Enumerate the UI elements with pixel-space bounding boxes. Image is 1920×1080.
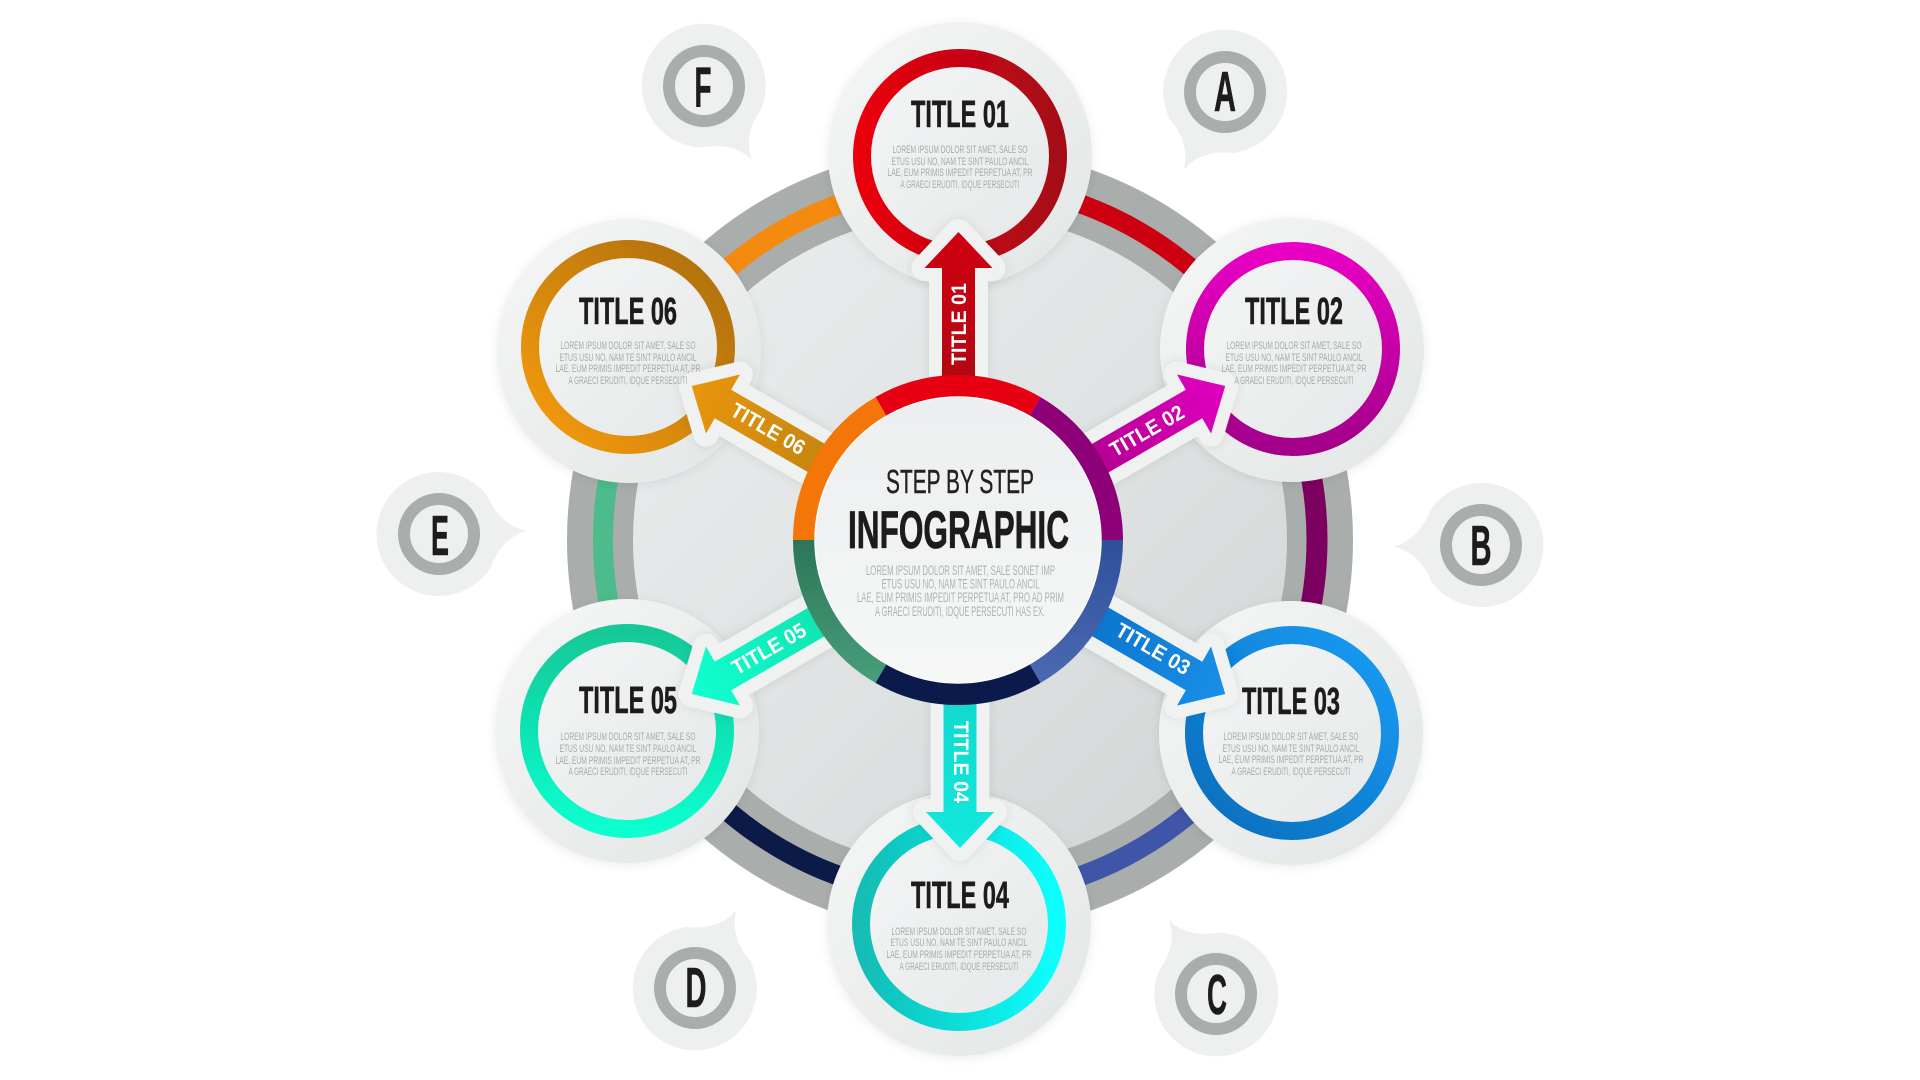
badge A: A xyxy=(1214,60,1236,124)
badge D xyxy=(611,881,791,1072)
arrow label 01: TITLE 01 xyxy=(948,283,971,365)
node text 04: TITLE 04 xyxy=(911,875,1009,917)
outer band segment: navy xyxy=(651,718,960,897)
badge A xyxy=(1129,8,1309,199)
node text 03: ETUS USU NO, NAM TE SINT PAULO ANCIL xyxy=(1222,743,1360,755)
center disc xyxy=(815,397,1101,683)
badge E xyxy=(374,469,529,598)
node circle 06 xyxy=(497,219,761,483)
center title: INFOGRAPHIC xyxy=(848,501,1069,560)
node circle 05 xyxy=(495,599,759,863)
node text 06: A GRAECI ERUDITI, IDQUE PERSECUTI xyxy=(568,375,688,387)
node text 05: A GRAECI ERUDITI, IDQUE PERSECUTI xyxy=(568,766,688,778)
node text 02: LAE, EUM PRIMIS IMPEDIT PERPETUA AT, PR xyxy=(1222,363,1367,375)
arrow label 04: TITLE 04 xyxy=(949,721,972,803)
center heading: STEP BY STEP xyxy=(886,464,1034,501)
node text 04: LAE, EUM PRIMIS IMPEDIT PERPETUA AT, PR xyxy=(886,949,1032,961)
node text 01: LOREM IPSUM DOLOR SIT AMET, SALE SO xyxy=(892,144,1028,156)
outer band segment: orange xyxy=(651,183,960,362)
node text 05: TITLE 05 xyxy=(579,680,677,722)
arrow label 02: TITLE 02 xyxy=(1106,401,1189,462)
hub segment: orange xyxy=(804,407,881,540)
arrow label 05: TITLE 05 xyxy=(728,619,811,680)
arrow 05 xyxy=(675,586,846,723)
node text 03: A GRAECI ERUDITI, IDQUE PERSECUTI xyxy=(1232,766,1350,778)
node text 02: A GRAECI ERUDITI, IDQUE PERSECUTI xyxy=(1234,375,1354,387)
background hexagon disc xyxy=(600,180,1320,900)
node circle 02 xyxy=(1160,218,1424,482)
node text 05 xyxy=(556,680,701,778)
node text 01: TITLE 01 xyxy=(911,94,1009,136)
badge B xyxy=(1392,482,1545,609)
node text 01: ETUS USU NO, NAM TE SINT PAULO ANCIL xyxy=(892,156,1028,168)
center paragraph: A GRAECI ERUDITI, IDQUE PERSECUTI HAS EX. xyxy=(875,603,1045,619)
node text 03 xyxy=(1218,681,1364,778)
badge C xyxy=(1116,886,1302,1080)
node text 06: TITLE 06 xyxy=(579,291,677,333)
arrow 04 xyxy=(926,690,994,848)
node text 04: ETUS USU NO, NAM TE SINT PAULO ANCIL xyxy=(890,937,1028,949)
node circle 01 xyxy=(828,22,1092,286)
node text 05: LOREM IPSUM DOLOR SIT AMET, SALE SO xyxy=(560,731,696,743)
node text 03: TITLE 03 xyxy=(1242,681,1340,723)
node text 02: TITLE 02 xyxy=(1245,291,1343,333)
badge E: E xyxy=(431,504,449,568)
node text 01 xyxy=(888,94,1033,191)
node text 06: LOREM IPSUM DOLOR SIT AMET, SALE SO xyxy=(560,340,696,352)
center paragraph: LAE, EUM PRIMIS IMPEDIT PERPETUA AT, PRO AD PRIM xyxy=(857,589,1064,605)
badge B: B xyxy=(1470,514,1492,578)
arrow 03 xyxy=(1071,586,1242,723)
arrow label 06: TITLE 06 xyxy=(726,399,809,460)
node text 02: ETUS USU NO, NAM TE SINT PAULO ANCIL xyxy=(1226,352,1362,364)
node text 04: LOREM IPSUM DOLOR SIT AMET, SALE SO xyxy=(892,926,1027,938)
center hub ring xyxy=(804,386,1112,694)
node text 05: ETUS USU NO, NAM TE SINT PAULO ANCIL xyxy=(560,743,696,755)
hub segment: purple xyxy=(1035,407,1112,540)
node text 03: LAE, EUM PRIMIS IMPEDIT PERPETUA AT, PR xyxy=(1218,754,1364,766)
outer band segment: green xyxy=(603,362,651,718)
outer band segment: blue xyxy=(960,718,1269,897)
outer band segment: red xyxy=(960,183,1269,362)
center paragraph: ETUS USU NO, NAM TE SINT PAULO ANCIL xyxy=(882,576,1040,592)
badge F: F xyxy=(694,56,712,120)
node circle 03 xyxy=(1159,601,1423,865)
hub segment: green xyxy=(804,540,881,673)
node text 05: LAE, EUM PRIMIS IMPEDIT PERPETUA AT, PR xyxy=(556,755,701,767)
node text 06 xyxy=(556,291,701,387)
hub segment: red xyxy=(881,386,1035,407)
arrow 02 xyxy=(1071,357,1242,494)
node text 02: LOREM IPSUM DOLOR SIT AMET, SALE SO xyxy=(1226,340,1362,352)
badge D: D xyxy=(686,956,706,1020)
node text 03: LOREM IPSUM DOLOR SIT AMET, SALE SO xyxy=(1224,731,1359,743)
node text 02 xyxy=(1222,291,1367,387)
node text 06: LAE, EUM PRIMIS IMPEDIT PERPETUA AT, PR xyxy=(556,363,701,375)
node text 04: A GRAECI ERUDITI, IDQUE PERSECUTI xyxy=(900,961,1018,973)
hub segment: navy xyxy=(881,673,1035,694)
node text 01: A GRAECI ERUDITI, IDQUE PERSECUTI xyxy=(900,179,1020,191)
center heading xyxy=(848,464,1069,560)
node circle 04 xyxy=(827,792,1091,1056)
badge C: C xyxy=(1207,963,1227,1027)
node text 06: ETUS USU NO, NAM TE SINT PAULO ANCIL xyxy=(560,352,696,364)
badge F xyxy=(618,0,804,194)
outer band segment: purple xyxy=(1269,362,1317,718)
center paragraph xyxy=(857,562,1064,619)
arrow 06 xyxy=(675,357,846,494)
center paragraph: LOREM IPSUM DOLOR SIT AMET, SALE SONET IMP xyxy=(866,562,1055,578)
arrow label 03: TITLE 03 xyxy=(1111,619,1194,680)
node text 01: LAE, EUM PRIMIS IMPEDIT PERPETUA AT, PR xyxy=(888,167,1033,179)
hub segment: blue xyxy=(1035,540,1112,673)
arrow 01 xyxy=(924,232,992,390)
node text 04 xyxy=(886,875,1032,973)
